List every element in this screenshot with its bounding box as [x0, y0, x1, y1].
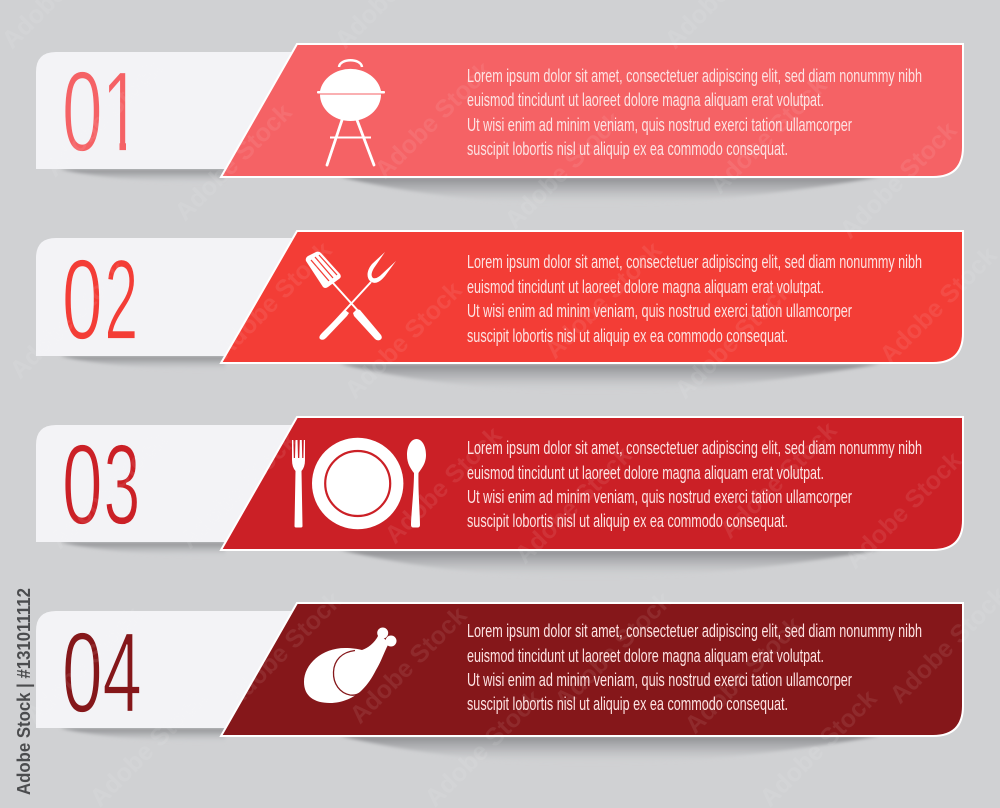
text block: step 03: suscipit lobortis nisl ut aliquip ex ea commodo consequat. [467, 511, 788, 531]
watermark pattern: Adobe Stock [669, 276, 797, 404]
watermark pattern: Adobe Stock [39, 54, 167, 182]
number 03 [62, 421, 140, 549]
watermark pattern: Adobe Stock [344, 601, 472, 729]
number 04 [62, 610, 142, 737]
icon: kettle grill [317, 60, 385, 165]
text block: step 01: Ut wisi enim ad minim veniam, quis nostrud exerci tation ullamcorper [467, 115, 852, 135]
number 03: 0 [62, 422, 103, 549]
watermark pattern: Adobe Stock [369, 56, 497, 184]
tab: step 01 [36, 52, 300, 169]
text block: step 02 [467, 252, 922, 346]
watermark pattern: Adobe Stock [19, 601, 147, 729]
watermark pattern: Adobe Stock [44, 426, 172, 554]
ribbon: step 04 [221, 603, 963, 736]
text block: step 02: Ut wisi enim ad minim veniam, quis nostrud exerci tation ullamcorper [467, 301, 852, 321]
number 04: 4 [102, 610, 142, 737]
icon: plate, fork and spoon [292, 438, 426, 529]
watermark pattern: Adobe Stock [499, 106, 627, 234]
number 01: 0 [62, 49, 103, 176]
panel: step 04 [36, 603, 963, 764]
text block: step 04 [467, 621, 922, 714]
number 02: 0 [62, 237, 103, 364]
icon: roast chicken leg [304, 628, 396, 703]
watermark pattern: Adobe Stock [4, 256, 132, 384]
tab: step 02 [36, 238, 300, 356]
ribbon: step 03 [221, 417, 963, 550]
number 01 [62, 49, 141, 176]
watermark pattern: Adobe Stock [539, 236, 667, 364]
text block: step 04: suscipit lobortis nisl ut aliquip ex ea commodo consequat. [467, 694, 788, 714]
text block: step 03: euismod tincidunt ut laoreet dolore magna aliquam erat volutpat. [467, 463, 824, 483]
watermark pattern: Adobe Stock [169, 98, 297, 226]
text block: step 02: euismod tincidunt ut laoreet dolore magna aliquam erat volutpat. [467, 277, 824, 297]
icon: crossed spatula and fork [306, 252, 396, 340]
watermark pattern: Adobe Stock [834, 116, 962, 244]
text block: step 03: Ut wisi enim ad minim veniam, quis nostrud exerci tation ullamcorper [467, 487, 852, 507]
ribbon: step 01 [221, 44, 963, 177]
ribbon: step 02 [221, 231, 963, 363]
watermark pattern: Adobe Stock [209, 236, 337, 364]
text block: step 01 [467, 66, 922, 159]
watermark pattern: Adobe Stock [339, 276, 467, 404]
watermark pattern: Adobe Stock [839, 446, 967, 574]
number 04: 0 [62, 610, 103, 737]
number 03: 3 [104, 421, 140, 548]
text block: step 02: suscipit lobortis nisl ut aliquip ex ea commodo consequat. [467, 326, 788, 346]
watermark pattern: Adobe Stock [874, 241, 1000, 369]
text block: step 03 [467, 438, 922, 531]
text block: step 01: euismod tincidunt ut laoreet dolore magna aliquam erat volutpat. [467, 90, 824, 110]
watermark pattern: Adobe Stock [509, 441, 637, 569]
text block: step 04: euismod tincidunt ut laoreet dolore magna aliquam erat volutpat. [467, 646, 824, 666]
watermark pattern: Adobe Stock [379, 421, 507, 549]
panel: step 03 [36, 417, 963, 578]
tab: step 03 [36, 425, 300, 542]
text block: step 04: Ut wisi enim ad minim veniam, quis nostrud exerci tation ullamcorper [467, 670, 852, 690]
number 02: 2 [104, 237, 138, 364]
number 01: 1 [102, 49, 141, 176]
panel: step 01 [36, 44, 963, 205]
watermark pattern: Adobe Stock [219, 586, 347, 714]
panel: step 02 [36, 231, 963, 392]
watermark pattern: Adobe Stock [679, 611, 807, 739]
watermark pattern: Adobe Stock [714, 416, 842, 544]
watermark pattern: Adobe Stock [704, 71, 832, 199]
stock id label: Adobe Stock | #131011112 [14, 588, 34, 795]
watermark pattern: Adobe Stock [549, 586, 677, 714]
number 02 [62, 237, 138, 364]
text block: step 01: suscipit lobortis nisl ut aliquip ex ea commodo consequat. [467, 139, 788, 159]
watermark pattern: Adobe Stock [174, 426, 302, 554]
tab: step 04 [36, 611, 300, 728]
